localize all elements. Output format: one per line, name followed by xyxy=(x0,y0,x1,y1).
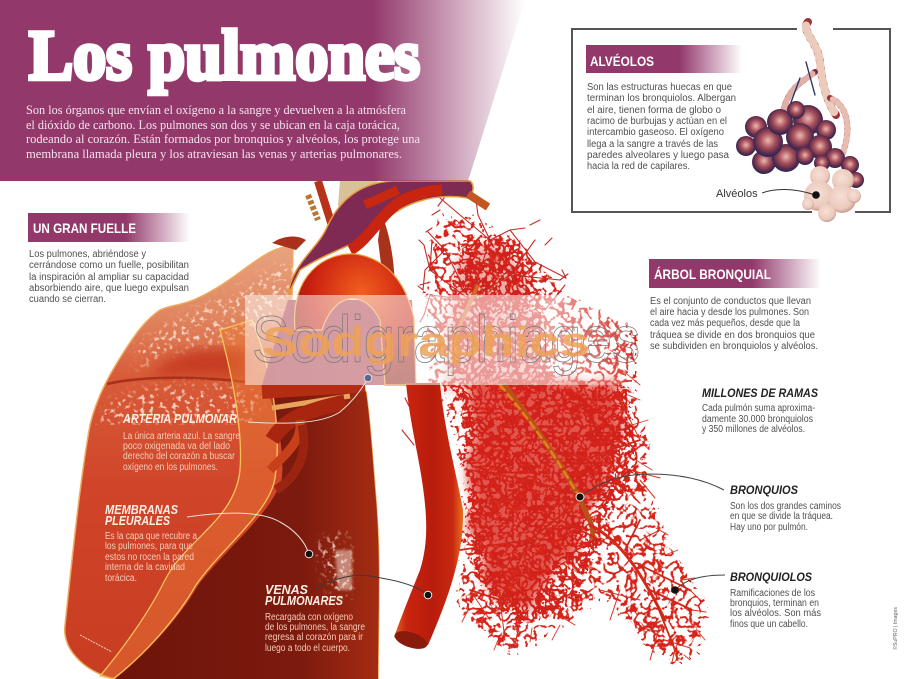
lung speckle xyxy=(95,255,300,425)
intro paragraph: rodeando al corazón. Están formados por bronquios y alvéolos, los protege una xyxy=(26,132,420,146)
callout: arteria pulmonar xyxy=(122,374,372,473)
tree upper solid core xyxy=(445,245,545,385)
heading: BRONQUIOLOS xyxy=(730,570,812,584)
body text xyxy=(702,403,815,435)
pleural membrane xyxy=(100,320,277,679)
callout: venas pulmonares xyxy=(265,575,432,654)
bronchial tree xyxy=(402,198,706,662)
body text: poco oxigenada va del lado xyxy=(123,441,230,452)
body text: intercambio gaseoso. El oxígeno xyxy=(587,127,724,138)
top lung ridge xyxy=(272,236,306,250)
body text: de los pulmones, la sangre xyxy=(265,622,365,633)
intro paragraph xyxy=(26,103,420,161)
leader line xyxy=(315,575,432,599)
panel: un gran fuelle xyxy=(28,213,190,305)
body text: luego a todo el cuerpo. xyxy=(265,643,350,654)
body text: los alvéolos. Son más xyxy=(730,608,821,619)
body text: Ramificaciones de los xyxy=(730,588,815,599)
left upper vessel xyxy=(318,181,334,232)
body text: se subdividen en bronquiolos y alvéolos. xyxy=(650,341,818,352)
body text: damente 30.000 bronquiolos xyxy=(702,414,813,425)
heart and great vessels xyxy=(262,181,488,652)
body text: La única arteria azul. La sangre xyxy=(123,431,240,442)
lung body xyxy=(65,246,379,679)
red branch xyxy=(350,190,442,250)
leader line xyxy=(187,513,313,558)
body text xyxy=(587,82,736,172)
body text: absorbiendo aire, que luego expulsan xyxy=(29,283,189,294)
watermark band xyxy=(245,295,640,385)
body text: oxígeno en los pulmones. xyxy=(123,462,218,473)
callout: bronquios xyxy=(576,474,841,533)
body text xyxy=(123,431,240,473)
body text: tráquea se divide en dos bronquios que xyxy=(650,330,815,341)
leader line xyxy=(248,374,372,423)
header banner xyxy=(0,0,525,181)
alvéolos label: Alvéolos xyxy=(716,188,758,200)
heading: PLEURALES xyxy=(105,514,171,528)
leader line xyxy=(671,575,725,594)
body text: derecho del corazón a buscar xyxy=(123,451,236,462)
lung dark interior xyxy=(115,392,379,679)
intro paragraph: Son los órganos que envían el oxígeno a la sangre y devuelven a la atmósfera xyxy=(26,103,406,117)
lung fissure xyxy=(107,378,245,384)
body text: la inspiración al ampliar su capacidad xyxy=(29,272,189,283)
body text: Cada pulmón suma aproxima- xyxy=(702,403,815,414)
body text: racimo de burbujas y actúan en el xyxy=(587,116,727,127)
body text: el aire hacia y desde los pulmones. Son xyxy=(650,307,809,318)
leader line xyxy=(576,474,724,501)
tree core mesh xyxy=(455,385,632,625)
heading: ÁRBOL BRONQUIAL xyxy=(654,266,771,282)
body text: Es el conjunto de conductos que llevan xyxy=(650,296,811,307)
watermark outline text: Sodigraphiages xyxy=(252,302,640,376)
title: Los pulmones xyxy=(29,17,420,95)
leader line xyxy=(762,189,820,199)
body text: terminan los bronquiolos. Albergan xyxy=(587,93,736,104)
body text: los pulmones, para que xyxy=(105,541,193,552)
pale tissue xyxy=(338,181,378,220)
heading: ALVÉOLOS xyxy=(590,53,654,69)
body text xyxy=(265,612,365,654)
body text: el aire, tienen forma de globo o xyxy=(587,105,721,116)
tree upper dense core xyxy=(445,235,550,385)
heart tubes lower xyxy=(262,385,365,490)
body text: Son las estructuras huecas en que xyxy=(587,82,732,93)
small branch xyxy=(308,195,318,220)
body text xyxy=(650,296,818,352)
body text xyxy=(29,249,189,305)
body text: interna de la cavidad xyxy=(105,562,185,573)
tree upper mesh xyxy=(422,215,630,385)
tree dense mesh xyxy=(438,385,702,660)
heading: VENAS xyxy=(265,583,309,597)
heading xyxy=(105,503,179,528)
watermark orange text: Sodgraphics xyxy=(262,318,590,365)
intro paragraph: membrana llamada pleura y los atraviesan las venas y arterias pulmonares. xyxy=(26,147,402,161)
veins white highlight xyxy=(315,530,355,600)
lung red patch xyxy=(150,348,245,378)
body text xyxy=(730,501,841,533)
callout: bronquiolos xyxy=(671,570,821,630)
body text: llega a la sangre a través de las xyxy=(587,139,718,150)
heading bar xyxy=(649,259,821,288)
body text: paredes alveolares y luego pasa xyxy=(587,150,729,161)
icon: alveoli cluster xyxy=(736,22,864,222)
heading: PULMONARES xyxy=(265,594,344,608)
left lung xyxy=(65,246,379,679)
panel frame xyxy=(572,29,890,212)
body text: bronquios, terminan en xyxy=(730,598,819,609)
body text: Es la capa que recubre a xyxy=(105,531,198,542)
body text: finos que un cabello. xyxy=(730,619,808,630)
body text: Los pulmones, abriéndose y xyxy=(29,249,146,260)
tree trunks xyxy=(460,350,706,662)
body text: cada vez más pequeños, desde que la xyxy=(650,318,800,329)
pulmonary artery tube xyxy=(394,383,463,646)
body text: y 350 millones de alvéolos. xyxy=(702,424,805,435)
tree top branches xyxy=(402,198,568,445)
body text: estos no rocen la pared xyxy=(105,552,194,563)
panel: alvéolos xyxy=(572,22,890,222)
heading: BRONQUIOS xyxy=(730,483,798,497)
heading bar xyxy=(586,45,742,73)
body text: Hay uno por pulmón. xyxy=(730,522,808,533)
aortic arch xyxy=(295,254,416,385)
pulmonary trunk xyxy=(288,181,473,295)
image credit: ©SuPRO | Images xyxy=(892,607,899,650)
body text xyxy=(730,588,821,630)
tube opening xyxy=(393,628,429,652)
panel: árbol bronquial xyxy=(649,259,821,352)
body text: torácica. xyxy=(105,573,137,584)
heading bar xyxy=(28,213,190,242)
dashed fissure xyxy=(80,635,112,652)
note: millones de ramas xyxy=(702,386,818,435)
callout: membranas pleurales xyxy=(105,503,313,584)
tree solid core xyxy=(468,380,625,605)
intro paragraph: el dióxido de carbono. Los pulmones son dos y se ubican en la caja torácica, xyxy=(26,118,400,132)
body text: regresa al corazón para ir xyxy=(265,632,364,643)
body text: cerrándose como un fuelle, posibilitan xyxy=(29,260,189,271)
heading: MILLONES DE RAMAS xyxy=(702,386,818,400)
body text: Recargada con oxígeno xyxy=(265,612,353,623)
heading: MEMBRANAS xyxy=(105,503,179,517)
heart backing xyxy=(262,300,416,385)
body text: Son los dos grandes caminos xyxy=(730,501,841,512)
heading: UN GRAN FUELLE xyxy=(33,220,136,236)
heading xyxy=(265,583,344,608)
end piece xyxy=(468,194,488,207)
body text: en que se divide la tráquea. xyxy=(730,511,833,522)
body text: cuando se cierran. xyxy=(29,294,106,305)
body text xyxy=(105,531,198,584)
heading: ARTERIA PULMONAR xyxy=(122,412,237,426)
body text: hacia la red de capilares. xyxy=(587,161,690,172)
